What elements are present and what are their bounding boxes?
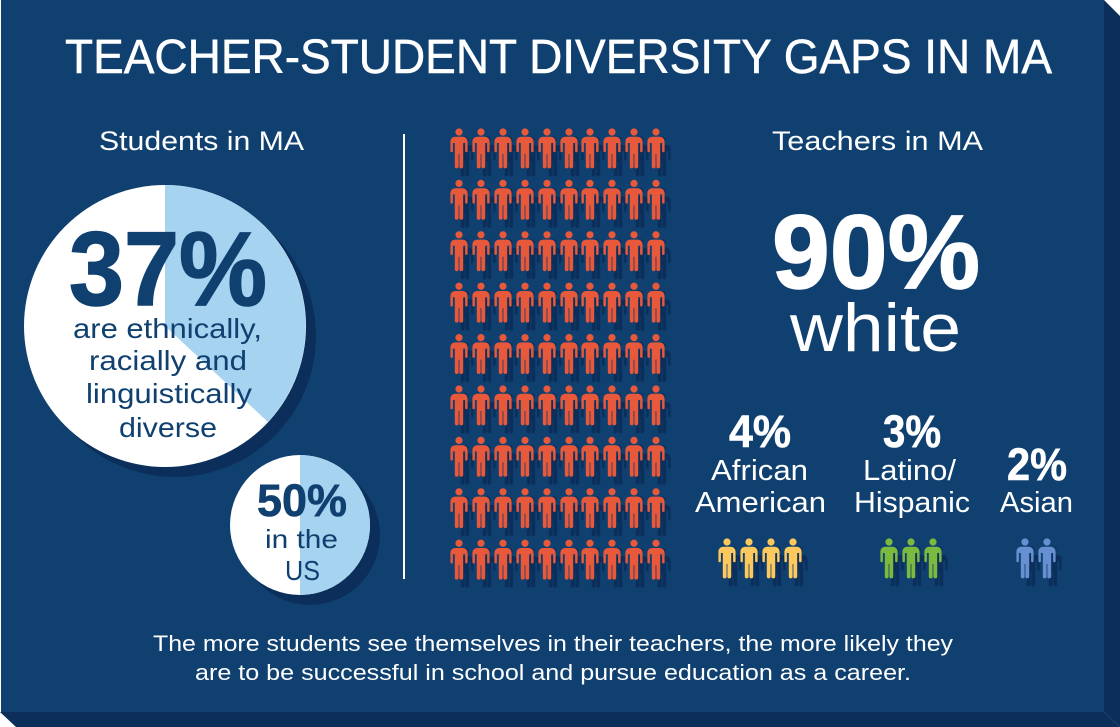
heading: teachers: Teachers in MA xyxy=(772,126,983,156)
icons: Asian teachers xyxy=(1016,538,1062,586)
pie caption: diverse xyxy=(119,412,217,443)
pie: 50 percent in the US xyxy=(230,455,380,605)
card bottom edge xyxy=(0,712,1120,727)
footer text xyxy=(153,631,953,685)
divider xyxy=(403,134,405,579)
pie: 50 percent in the US: US xyxy=(285,555,320,586)
small pie caption: in the xyxy=(265,524,338,554)
pie caption: racially and xyxy=(89,345,247,376)
stat: Latino/Hispanic: Latino/ xyxy=(863,455,957,487)
stat: 90 percent: 90% xyxy=(772,194,980,311)
label: white: white xyxy=(789,290,961,366)
icons: Latino teachers xyxy=(880,538,948,586)
stat: African American: American xyxy=(695,487,826,519)
stat: 50 percent: 50% xyxy=(257,475,347,526)
icons: African American teachers xyxy=(718,538,808,586)
stat: 37 percent: 37% xyxy=(69,211,267,328)
stat: African American: 4% xyxy=(729,406,791,457)
pie: 37 percent of MA students xyxy=(24,185,316,477)
footer text: are to be successful in school and pursue education as a career. xyxy=(195,660,911,685)
stat: Asian: Asian xyxy=(1000,487,1073,519)
title: TEACHER-STUDENT DIVERSITY GAPS IN MA xyxy=(65,31,1052,84)
stat: Asian xyxy=(1000,439,1073,519)
stat: African American: African xyxy=(711,455,808,487)
stat: African American xyxy=(695,406,826,519)
pictogram: 90 percent white teachers xyxy=(450,128,671,588)
stat: Asian: 2% xyxy=(1007,439,1067,490)
pie caption: are ethnically, xyxy=(73,313,262,344)
stat: Latino/Hispanic xyxy=(854,406,970,519)
card side edge xyxy=(1104,0,1120,727)
stat: Latino/Hispanic: 3% xyxy=(883,406,941,457)
pie caption: linguistically xyxy=(86,378,252,409)
footer text: The more students see themselves in their teachers, the more likely they xyxy=(153,631,953,656)
stat: Latino/Hispanic: Hispanic xyxy=(854,487,970,519)
heading: students: Students in MA xyxy=(99,126,304,156)
pie caption xyxy=(73,313,262,443)
